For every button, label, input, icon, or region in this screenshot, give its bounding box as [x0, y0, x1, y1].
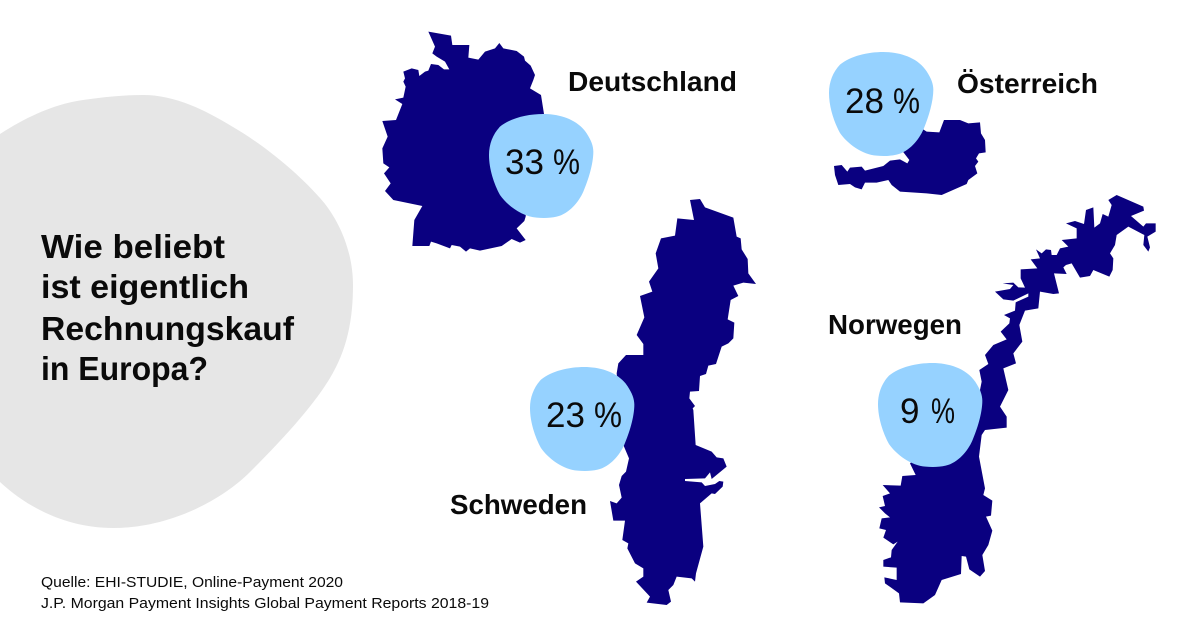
- value bubble: 9 %: [878, 363, 982, 467]
- map: Germany: [382, 32, 544, 252]
- title: Rechnungskauf: [41, 310, 295, 347]
- label: Schweden: Schweden: [450, 489, 587, 520]
- map: Austria: [834, 120, 986, 195]
- source note: [41, 574, 489, 612]
- map: Norway: [879, 195, 1156, 603]
- value: 9 %: %: [931, 392, 955, 431]
- value: 9 %: 9: [900, 392, 919, 431]
- source note: Quelle: EHI-STUDIE, Online-Payment 2020: [41, 574, 343, 591]
- value bubble: 33 %: [489, 114, 593, 218]
- label: Deutschland: Deutschland: [568, 66, 737, 97]
- value: 28 %: %: [893, 82, 920, 121]
- panel: Österreich: [829, 52, 1098, 195]
- value bubble: 23 %: [530, 367, 634, 471]
- value: 23 %: 23: [546, 396, 585, 435]
- value bubble: 28 %: [829, 52, 933, 156]
- title: [41, 228, 295, 387]
- title: ist eigentlich: [41, 268, 249, 305]
- value: 33 %: 33: [505, 143, 544, 182]
- panel: Schweden: [450, 199, 756, 605]
- value: 28 %: 28: [845, 82, 884, 121]
- label: Österreich: Österreich: [957, 68, 1098, 99]
- map: Sweden: [610, 199, 756, 605]
- grey background blob: [0, 95, 353, 528]
- label: Norwegen: Norwegen: [828, 309, 962, 340]
- panel: Deutschland: [382, 32, 737, 252]
- title: Wie beliebt: [41, 228, 225, 265]
- title: in Europa?: [41, 350, 208, 387]
- value: 33 %: %: [553, 143, 580, 182]
- source note: J.P. Morgan Payment Insights Global Payment Reports 2018-19: [41, 595, 489, 612]
- panel: Norwegen: [828, 195, 1156, 603]
- value: 23 %: %: [594, 396, 622, 435]
